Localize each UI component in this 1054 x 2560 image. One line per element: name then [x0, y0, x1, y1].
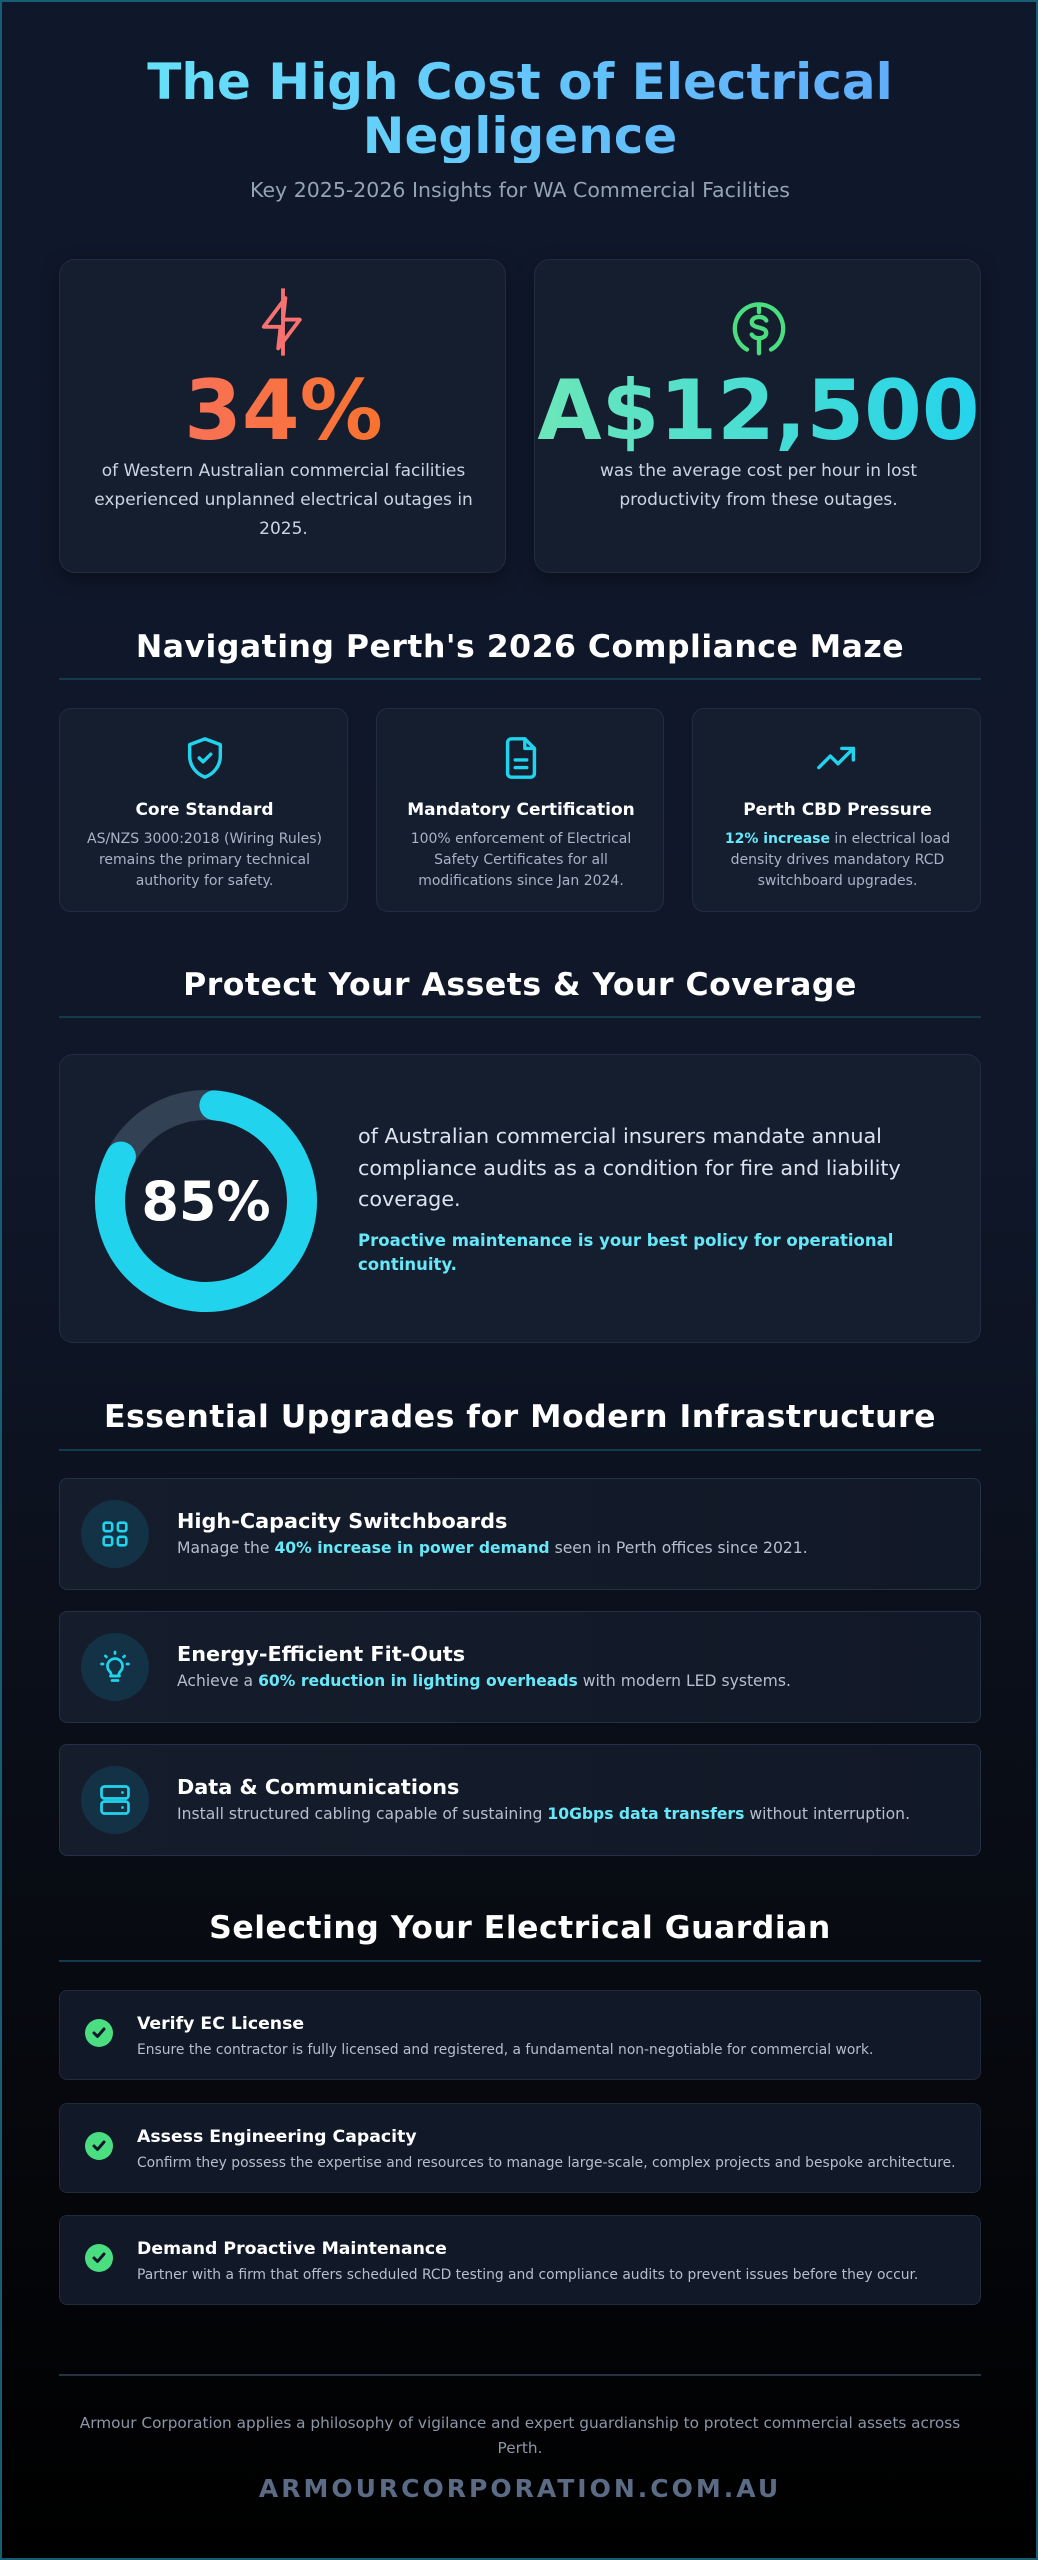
stat description: of Western Australian commercial facilities experienced unplanned electrical outages in 2025.	[94, 461, 473, 539]
card text: AS/NZS 3000:2018 (Wiring Rules) remains the primary technical authority for safety.	[87, 831, 322, 889]
footer text: Armour Corporation applies a philosophy of vigilance and expert guardianship to protect commercial assets across Perth.	[80, 2414, 960, 2457]
icon: trending up	[817, 746, 856, 770]
panel: switchboards: High-Capacity Switchboards	[177, 1509, 507, 1533]
card title: Perth CBD Pressure	[743, 800, 932, 820]
panel: CBD pressure	[692, 708, 981, 912]
panel: energy efficient: Achieve a 60% reduction in lighting overheads with modern LED systems.	[177, 1672, 791, 1690]
title: Negligence	[363, 107, 677, 165]
icon: lightbulb	[81, 1633, 149, 1701]
panel: energy efficient: Energy-Efficient Fit-Outs	[177, 1642, 465, 1666]
stat number 34%	[60, 366, 507, 456]
icon: check	[85, 2244, 113, 2272]
icon: document	[506, 737, 536, 779]
panel: engineering capacity	[59, 2103, 981, 2193]
card text: 100% enforcement of Electrical Safety Certificates for all modifications since Jan 2024.	[411, 831, 631, 889]
card title: Core Standard	[135, 800, 274, 820]
icon: grid	[81, 1500, 149, 1568]
footer url: ARMOURCORPORATION.COM.AU	[259, 2474, 781, 2503]
stat number A$12,500: A$12,500	[537, 362, 980, 459]
panel: insurance	[59, 1054, 981, 1343]
panel: verify license: Verify EC License	[137, 2014, 304, 2034]
panel: stat outages	[59, 259, 506, 573]
panel: proactive maintenance	[59, 2215, 981, 2305]
panel: stat cost	[534, 259, 981, 573]
card title: Mandatory Certification	[407, 800, 635, 820]
subtitle: Key 2025-2026 Insights for WA Commercial Facilities	[250, 178, 790, 202]
panel: data: Data & Communications	[177, 1775, 459, 1799]
panel: engineering capacity: Assess Engineering Capacity	[137, 2127, 417, 2147]
donut chart 85%	[95, 1090, 317, 1312]
heading: guardian: Selecting Your Electrical Guardian	[209, 1910, 831, 1946]
panel: proactive maintenance: Partner with a firm that offers scheduled RCD testing and compliance audits to prevent issues before they occur.	[137, 2267, 918, 2283]
icon: shield check	[188, 737, 222, 779]
panel: data: Install structured cabling capable of sustaining 10Gbps data transfers without interruption.	[177, 1805, 910, 1823]
panel: switchboards	[59, 1478, 981, 1590]
panel: energy efficient	[59, 1611, 981, 1723]
heading: protect: Protect Your Assets & Your Coverage	[183, 967, 857, 1003]
title	[32, 55, 1008, 163]
card text: 12% increase in electrical load density drives mandatory RCD switchboard upgrades.	[725, 831, 950, 889]
panel: verify license	[59, 1990, 981, 2080]
panel: mandatory certification	[376, 708, 664, 912]
icon: check	[85, 2019, 113, 2047]
callout: Proactive maintenance is your best policy for operational continuity.	[358, 1231, 893, 1274]
panel: data	[59, 1744, 981, 1856]
icon: check	[85, 2132, 113, 2160]
panel: switchboards: Manage the 40% increase in power demand seen in Perth offices since 2021.	[177, 1539, 808, 1557]
heading: upgrades: Essential Upgrades for Modern Infrastructure	[104, 1399, 936, 1435]
stat description: was the average cost per hour in lost productivity from these outages.	[600, 461, 917, 510]
icon: dollar circle	[732, 302, 786, 356]
title: The High Cost of Electrical	[147, 53, 893, 111]
icon: lightning bolt	[262, 288, 302, 356]
stat number 34%: 34%	[184, 362, 383, 459]
insurance text: of Australian commercial insurers mandate annual compliance audits as a condition for fire and liability coverage.	[358, 1124, 901, 1211]
panel: engineering capacity: Confirm they possess the expertise and resources to manage large-scale, complex projects and bespoke architecture.	[137, 2155, 956, 2171]
heading: compliance: Navigating Perth's 2026 Compliance Maze	[136, 629, 904, 665]
donut label: 85%	[141, 1170, 271, 1233]
icon: server	[81, 1766, 149, 1834]
panel: proactive maintenance: Demand Proactive Maintenance	[137, 2239, 447, 2259]
panel: core standard	[59, 708, 348, 912]
panel: verify license: Ensure the contractor is fully licensed and registered, a fundamental non-negotiable for commercial work.	[137, 2042, 873, 2058]
